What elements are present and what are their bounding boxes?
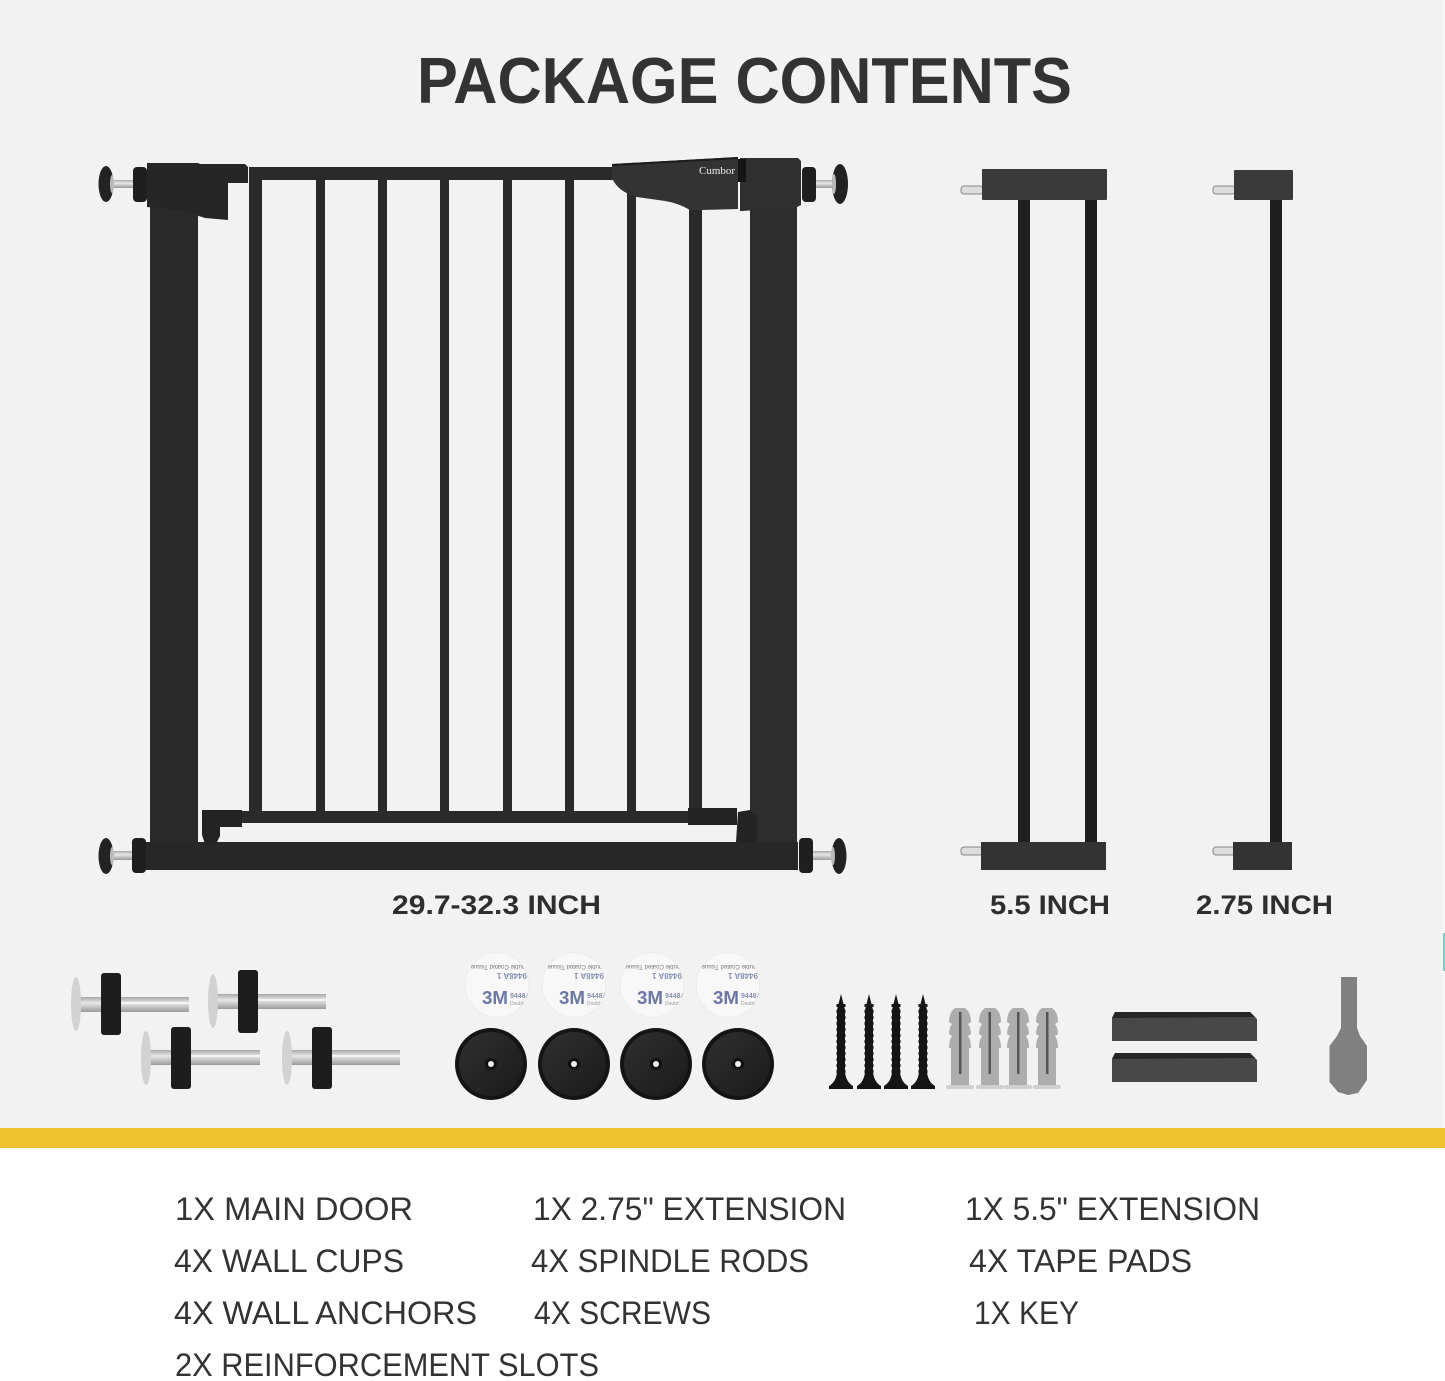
icon: key	[1330, 977, 1367, 1095]
tape pad 2	[542, 952, 608, 1018]
wall cups item: 4X WALL CUPS	[174, 1243, 404, 1279]
2.75 extension item: 1X 2.75" EXTENSION	[533, 1191, 846, 1227]
screws	[829, 994, 935, 1089]
2.75 inch size label: 2.75 INCH	[1196, 890, 1333, 920]
brand label: Cumbor	[699, 166, 736, 177]
spindle rods item: 4X SPINDLE RODS	[531, 1243, 809, 1279]
tape pad 1: 9448A	[510, 993, 531, 1000]
tape pads item: 4X TAPE PADS	[969, 1243, 1192, 1279]
screw 2	[857, 994, 881, 1089]
tape pads	[465, 952, 762, 1018]
spindle rods	[71, 970, 400, 1089]
screw 1	[829, 994, 853, 1089]
tape pad 4: 3M	[713, 988, 739, 1008]
wall cups	[455, 1028, 774, 1100]
spindle rod 3	[141, 1027, 260, 1089]
tape pad 3: 9448A	[665, 993, 686, 1000]
tape pad 3: Double	[665, 1001, 681, 1007]
tape pad 2: Double Coated Tissue	[547, 963, 607, 969]
wall cup 2	[538, 1028, 610, 1100]
reinforcement slot 2	[1112, 1053, 1257, 1082]
tape pad 2: 9448A	[587, 993, 608, 1000]
wall anchor 3	[1004, 1008, 1032, 1089]
gate right post	[750, 205, 797, 845]
tape pad 4: Double	[741, 1001, 757, 1007]
screw 3	[884, 994, 908, 1089]
top right latch handle	[612, 157, 801, 211]
tape pad 1	[465, 952, 531, 1018]
screws item: 4X SCREWS	[534, 1295, 711, 1331]
tape pad 2: 3M	[559, 988, 585, 1008]
tape pad 4: 9448A	[741, 993, 762, 1000]
reinforcement slots	[1112, 1012, 1257, 1082]
tape pad 2: 9448A 1	[573, 971, 604, 980]
top left spindle	[98, 166, 147, 202]
tape pad 1: Double Coated Tissue	[470, 963, 530, 969]
tape pad 1: 3M	[482, 988, 508, 1008]
wall anchors	[946, 1008, 1061, 1089]
top right spindle	[802, 164, 848, 204]
tape pad 4: Double Coated Tissue	[701, 963, 761, 969]
screw 4	[911, 994, 935, 1089]
bottom right latch	[688, 808, 757, 842]
tape pad 4	[696, 952, 762, 1018]
tape pad 3: Double Coated Tissue	[625, 963, 685, 969]
tape pad 3: 9448A 1	[651, 971, 682, 980]
bottom left latch	[202, 810, 242, 844]
wall anchor 4	[1033, 1008, 1061, 1089]
gate left post	[150, 205, 198, 845]
gate base rail	[146, 842, 798, 870]
wall cup 1	[455, 1028, 527, 1100]
contents list	[174, 1191, 1260, 1381]
tape pad 1: Double	[510, 1001, 526, 1007]
wall cup 4	[702, 1028, 774, 1100]
tape pad 1: 9448A 1	[496, 971, 527, 980]
tape pad 3: 3M	[637, 988, 663, 1008]
5.5 inch extension	[961, 169, 1107, 870]
5.5 inch size label: 5.5 INCH	[990, 890, 1110, 920]
main gate size label: 29.7-32.3 INCH	[392, 890, 601, 920]
door frame	[242, 167, 702, 823]
title: PACKAGE CONTENTS	[417, 44, 1072, 117]
yellow divider band	[0, 1128, 1445, 1148]
tape pad 4: 9448A 1	[727, 971, 758, 980]
white contents panel	[0, 1148, 1445, 1381]
wall cup 3	[620, 1028, 692, 1100]
reinforcement slot 1	[1112, 1012, 1257, 1041]
spindle rod 1	[71, 973, 189, 1035]
2.75 inch extension	[1213, 170, 1293, 870]
wall anchor 2	[976, 1008, 1004, 1089]
spindle rod 2	[208, 970, 326, 1033]
bottom left spindle	[98, 838, 146, 874]
tape pad 3	[620, 952, 686, 1018]
wall anchors item: 4X WALL ANCHORS	[174, 1295, 477, 1331]
bottom right spindle	[799, 838, 846, 874]
top left hinge bracket	[147, 163, 248, 220]
main door item: 1X MAIN DOOR	[175, 1191, 413, 1227]
main gate	[98, 157, 848, 874]
wall anchor 1	[946, 1008, 974, 1089]
5.5 extension item: 1X 5.5" EXTENSION	[965, 1191, 1260, 1227]
spindle rod 4	[282, 1027, 400, 1089]
tape pad 2: Double	[587, 1001, 603, 1007]
key item: 1X KEY	[974, 1295, 1079, 1331]
